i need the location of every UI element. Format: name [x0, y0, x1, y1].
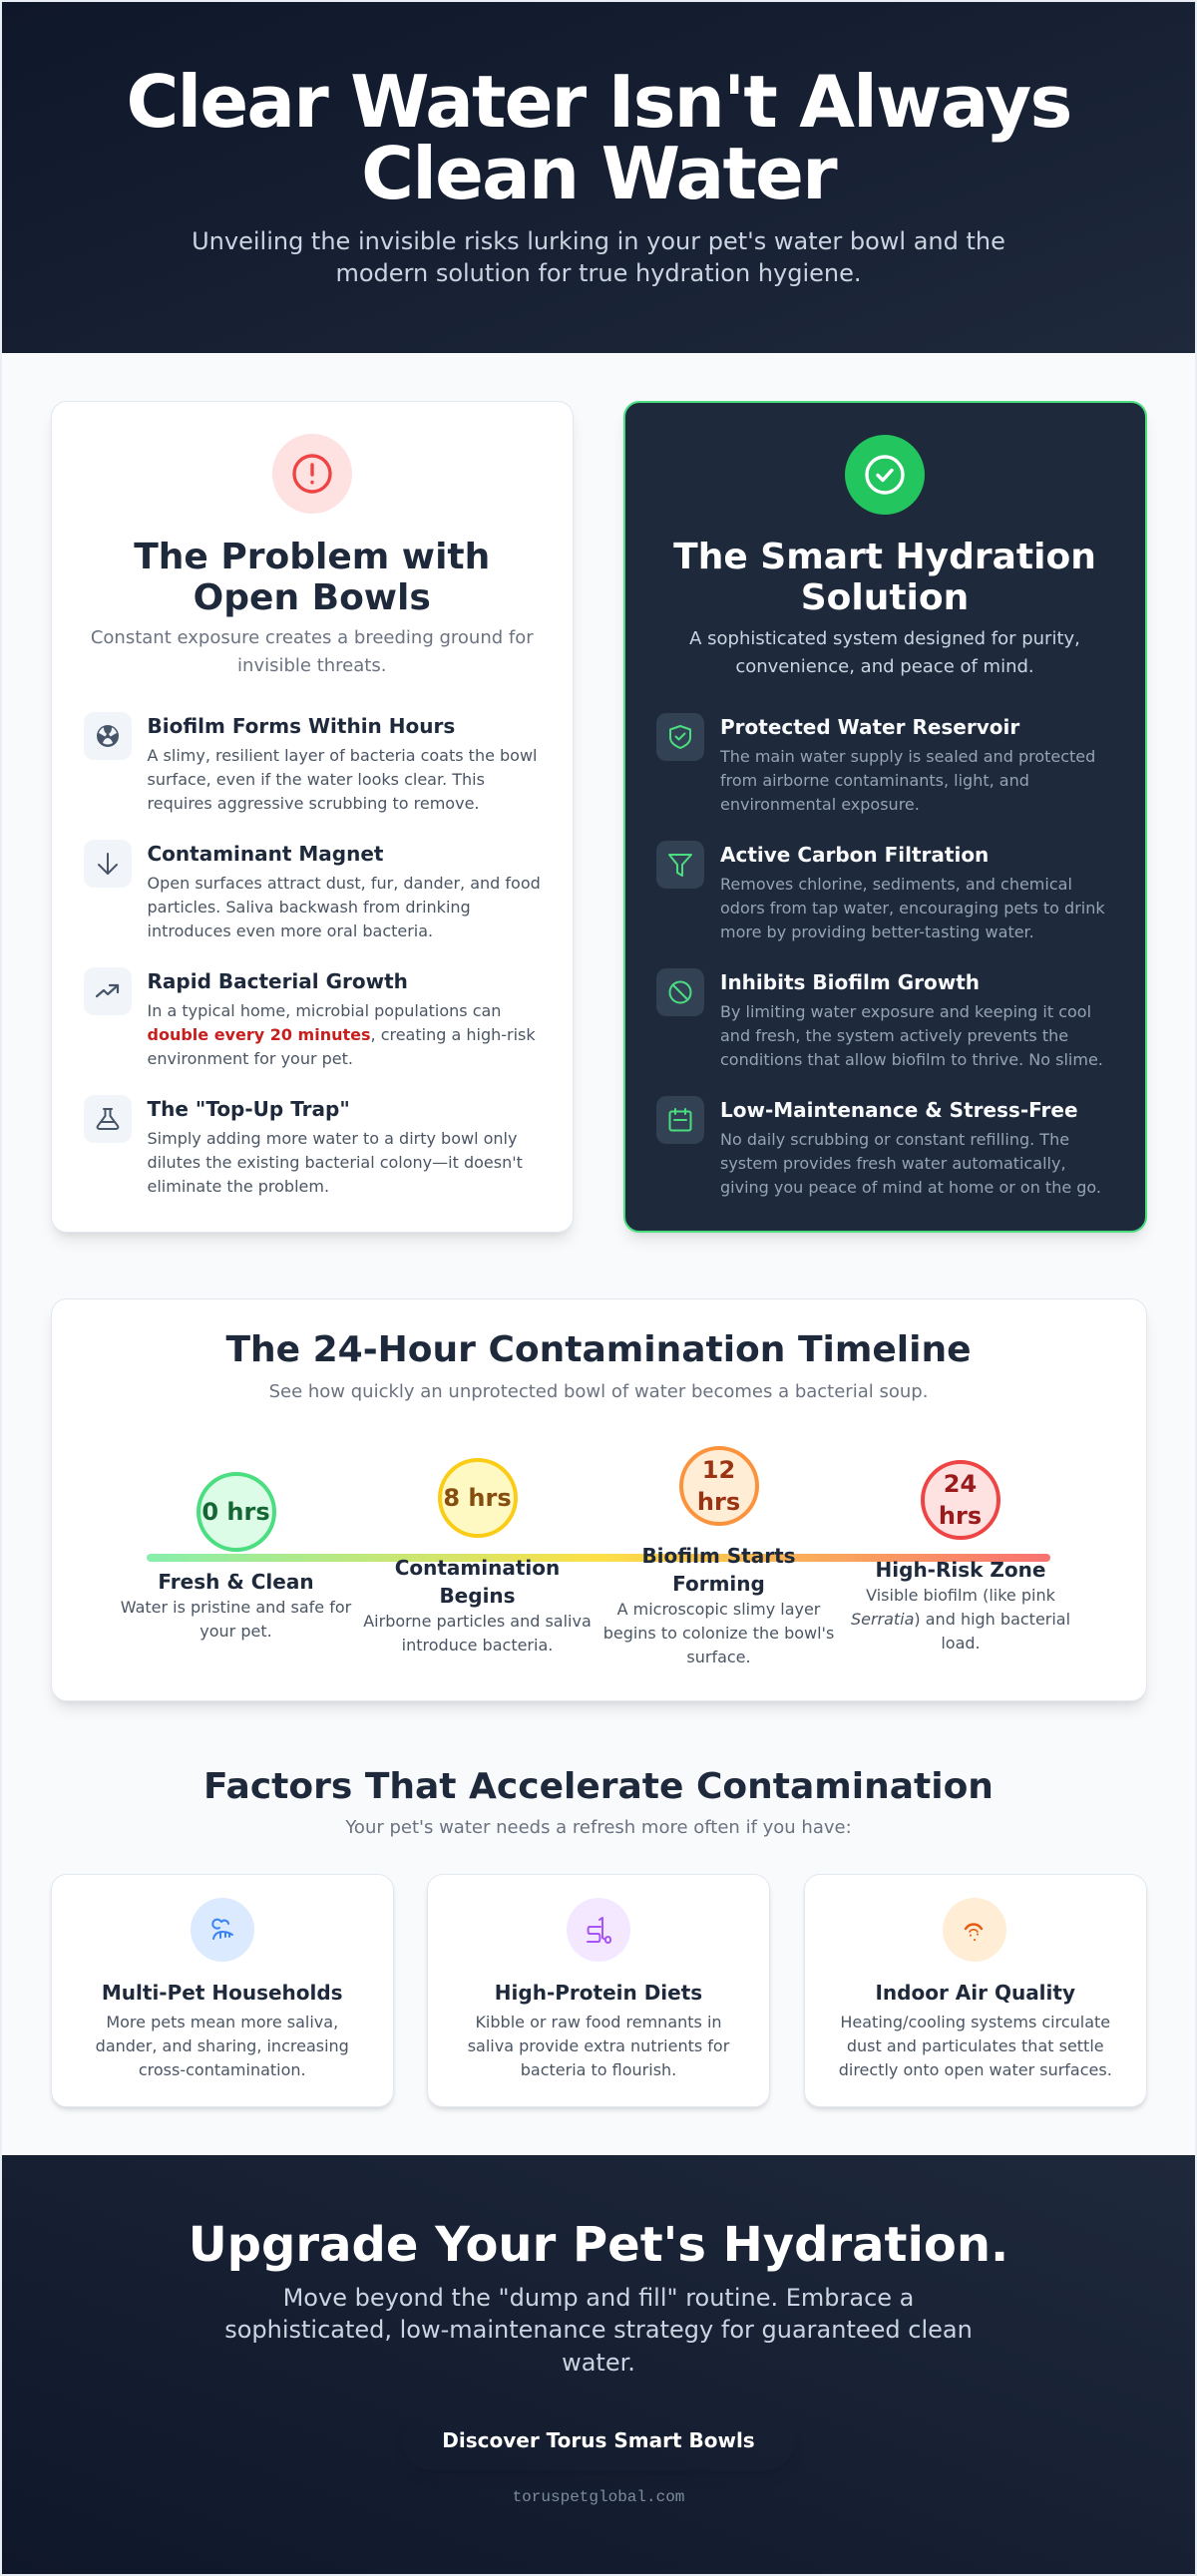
- item text: rapid bacterial growth: [148, 969, 536, 1068]
- item text: biofilm: A slimy, resilient layer of bacteria coats the bowl: [148, 746, 537, 765]
- factors heading: Factors That Accelerate Contamination: [203, 1766, 994, 1807]
- step 8 hrs circle: 8 hrs: [443, 1484, 512, 1512]
- step 8 text: [363, 1556, 592, 1655]
- step 8 text: Begins: [439, 1584, 516, 1608]
- item text: top-up trap: The "Top-Up Trap": [148, 1097, 350, 1121]
- icon: pets: [190, 1898, 253, 1962]
- step 24 text: [851, 1558, 1070, 1653]
- item text: inhibits biofilm: By limiting water exposure and keeping it cool: [720, 1002, 1091, 1021]
- step 24 text: High-Risk Zone: [876, 1558, 1045, 1582]
- footer title: Upgrade Your Pet's Hydration.: [189, 2216, 1008, 2272]
- item text: inhibits biofilm: and fresh, the system actively prevents the: [720, 1026, 1068, 1045]
- icon: arrow down: [84, 840, 132, 888]
- step 0 hrs circle: [196, 1472, 275, 1552]
- intro text: [91, 627, 534, 676]
- step 12 text: Biofilm Starts: [641, 1544, 796, 1568]
- step 24 text: Serratia) and high bacterial: [851, 1610, 1070, 1629]
- item text: contaminant magnet: Contaminant Magnet: [148, 842, 383, 866]
- subtitle: [192, 227, 1005, 287]
- factor text: Heating/cooling systems circulate: [840, 2013, 1110, 2031]
- item text: protected reservoir: Protected Water Reservoir: [720, 715, 1019, 739]
- item text: carbon filtration: [720, 843, 1105, 941]
- step 0 hrs circle: 0 hrs: [201, 1498, 270, 1526]
- step 12 text: surface.: [686, 1648, 751, 1666]
- factor text: [96, 2013, 349, 2079]
- item text: low maintenance: giving you peace of mind at home or on the go.: [720, 1178, 1101, 1197]
- icon: shield check: [656, 713, 704, 761]
- item text: carbon filtration: Removes chlorine, sediments, and chemical: [720, 875, 1072, 894]
- item text: carbon filtration: more by providing better-tasting water.: [720, 922, 1034, 941]
- factor text: directly onto open water surfaces.: [839, 2060, 1112, 2079]
- item text: carbon filtration: odors from tap water, encouraging pets to drink: [720, 899, 1105, 918]
- step 12 text: Forming: [672, 1572, 765, 1596]
- intro text: Constant exposure creates a breeding ground for: [91, 627, 534, 648]
- factor text: [839, 2013, 1112, 2079]
- item text: protected reservoir: [720, 715, 1095, 814]
- item text: biofilm: surface, even if the water looks clear. This: [148, 770, 485, 789]
- intro text: A sophisticated system designed for purity,: [689, 628, 1080, 649]
- timeline heading: The 24-Hour Contamination Timeline: [225, 1329, 972, 1370]
- factor title: High-Protein Diets: [495, 1981, 702, 2005]
- item text: low maintenance: [720, 1098, 1101, 1197]
- icon: alert circle: [272, 434, 352, 514]
- factor text: dust and particulates that settle: [847, 2036, 1104, 2055]
- item text: contaminant magnet: particles. Saliva backwash from drinking: [148, 898, 471, 917]
- item text: inhibits biofilm: conditions that allow biofilm to thrive. No slime.: [720, 1050, 1103, 1069]
- step 24 hrs circle: [920, 1460, 999, 1540]
- website url: toruspetglobal.com: [513, 2488, 684, 2506]
- item text: top-up trap: dilutes the existing bacterial colony—it doesn't: [148, 1153, 523, 1172]
- panel: 24-hour timeline: [50, 1298, 1147, 1701]
- factor title: Indoor Air Quality: [875, 1981, 1075, 2005]
- heading: [673, 537, 1096, 618]
- factor text: Kibble or raw food remnants in: [475, 2013, 722, 2031]
- step 0 text: Fresh & Clean: [158, 1570, 314, 1594]
- item text: rapid bacterial growth: Rapid Bacterial Growth: [148, 969, 408, 993]
- intro text: convenience, and peace of mind.: [735, 656, 1034, 677]
- icon: check circle: [845, 435, 925, 515]
- main title: Clear Water Isn't Always: [126, 60, 1071, 144]
- item text: biofilm: Biofilm Forms Within Hours: [148, 714, 455, 738]
- icon: calendar: [656, 1096, 704, 1144]
- item text: low maintenance: No daily scrubbing or constant refilling. The: [720, 1130, 1069, 1149]
- heading: Open Bowls: [194, 577, 431, 618]
- main title: Clean Water: [361, 132, 836, 215]
- item text: protected reservoir: from airborne contaminants, light, and: [720, 771, 1029, 790]
- item text: inhibits biofilm: Inhibits Biofilm Growth: [720, 970, 980, 994]
- factor text: saliva provide extra nutrients for: [468, 2036, 729, 2055]
- subtitle: Unveiling the invisible risks lurking in your pet's water bowl and the: [192, 227, 1005, 255]
- step 24 hrs circle: 24: [944, 1470, 977, 1498]
- item text: rapid bacterial growth: environment for your pet.: [148, 1049, 353, 1068]
- footer text: [224, 2284, 973, 2377]
- footer text: Move beyond the "dump and fill" routine. Embrace a: [283, 2284, 914, 2312]
- item text: contaminant magnet: [148, 842, 541, 940]
- heading: The Problem with: [134, 537, 490, 577]
- panel: indoor air quality: [804, 1874, 1147, 2107]
- footer banner: [2, 2155, 1195, 2574]
- step 24 text: Visible biofilm (like pink: [866, 1586, 1055, 1605]
- icon: trending up: [84, 967, 132, 1015]
- step 12 text: begins to colonize the bowl's: [603, 1624, 834, 1643]
- step 12 hrs circle: hrs: [697, 1488, 740, 1516]
- step 0 text: Water is pristine and safe for: [121, 1598, 351, 1617]
- item text: top-up trap: eliminate the problem.: [148, 1177, 329, 1196]
- step 24 hrs circle: hrs: [939, 1502, 982, 1530]
- item text: low maintenance: system provides fresh water automatically,: [720, 1154, 1066, 1173]
- step 12 text: [603, 1544, 834, 1666]
- icon: food: [567, 1898, 630, 1962]
- step 8 text: Contamination: [395, 1556, 560, 1580]
- subtitle: modern solution for true hydration hygiene.: [335, 259, 862, 287]
- step 8 hrs circle: [437, 1458, 517, 1538]
- panel: the problem with open bowls: [50, 401, 574, 1233]
- footer text: sophisticated, low-maintenance strategy for guaranteed clean: [224, 2316, 973, 2344]
- heading: [134, 537, 490, 618]
- step 0 text: [121, 1570, 351, 1641]
- panel: high-protein diets: [427, 1874, 770, 2107]
- main title: [126, 60, 1071, 215]
- step 12 hrs circle: [678, 1446, 758, 1526]
- factor text: dander, and sharing, increasing: [96, 2036, 349, 2055]
- icon: flask: [84, 1095, 132, 1143]
- icon: biofilm: [84, 712, 132, 760]
- intro text: invisible threats.: [237, 655, 386, 676]
- step 12 text: A microscopic slimy layer: [617, 1600, 820, 1619]
- timeline subtitle: See how quickly an unprotected bowl of water becomes a bacterial soup.: [269, 1380, 928, 1402]
- factor title: Multi-Pet Households: [102, 1981, 343, 2005]
- step 0 text: your pet.: [200, 1622, 272, 1641]
- icon: filter: [656, 841, 704, 889]
- call to action button: Discover Torus Smart Bowls: [442, 2428, 755, 2452]
- factor text: [468, 2013, 730, 2079]
- icon: ban: [656, 968, 704, 1016]
- footer text: water.: [562, 2349, 635, 2377]
- item text: top-up trap: Simply adding more water to a dirty bowl only: [148, 1129, 517, 1148]
- heading: Solution: [801, 577, 969, 618]
- header banner: [2, 2, 1195, 353]
- item text: biofilm: requires aggressive scrubbing to remove.: [148, 794, 479, 813]
- intro text: [689, 628, 1080, 677]
- panel: the smart hydration solution: [622, 401, 1147, 1233]
- factor text: bacteria to flourish.: [521, 2060, 676, 2079]
- gradient bar: [147, 1554, 1050, 1562]
- factor text: cross-contamination.: [139, 2060, 306, 2079]
- factors subtitle: Your pet's water needs a refresh more often if you have:: [345, 1817, 852, 1838]
- item text: contaminant magnet: Open surfaces attract dust, fur, dander, and food: [148, 874, 541, 893]
- heading: The Smart Hydration: [673, 537, 1096, 577]
- item text: top-up trap: [148, 1097, 523, 1196]
- step 24 text: load.: [941, 1634, 981, 1653]
- item text: contaminant magnet: introduces even more oral bacteria.: [148, 921, 433, 940]
- item text: rapid bacterial growth: In a typical home, microbial populations can: [148, 1001, 501, 1020]
- step 12 hrs circle: 12: [702, 1456, 735, 1484]
- item text: rapid bacterial growth: double every 20 minutes, creating a high-risk: [148, 1025, 536, 1044]
- factor text: More pets mean more saliva,: [106, 2013, 338, 2031]
- item text: carbon filtration: Active Carbon Filtration: [720, 843, 989, 867]
- item text: biofilm: [148, 714, 537, 813]
- call to action button: [402, 2410, 795, 2470]
- item text: protected reservoir: environmental exposure.: [720, 795, 920, 814]
- icon: air waves: [943, 1898, 1006, 1962]
- item text: inhibits biofilm: [720, 970, 1103, 1069]
- step 8 text: Airborne particles and saliva: [363, 1612, 592, 1631]
- item text: protected reservoir: The main water supply is sealed and protected: [720, 747, 1095, 766]
- panel: multi-pet households: [51, 1874, 393, 2107]
- item text: low maintenance: Low-Maintenance & Stress-Free: [720, 1098, 1078, 1122]
- step 8 text: introduce bacteria.: [402, 1636, 553, 1655]
